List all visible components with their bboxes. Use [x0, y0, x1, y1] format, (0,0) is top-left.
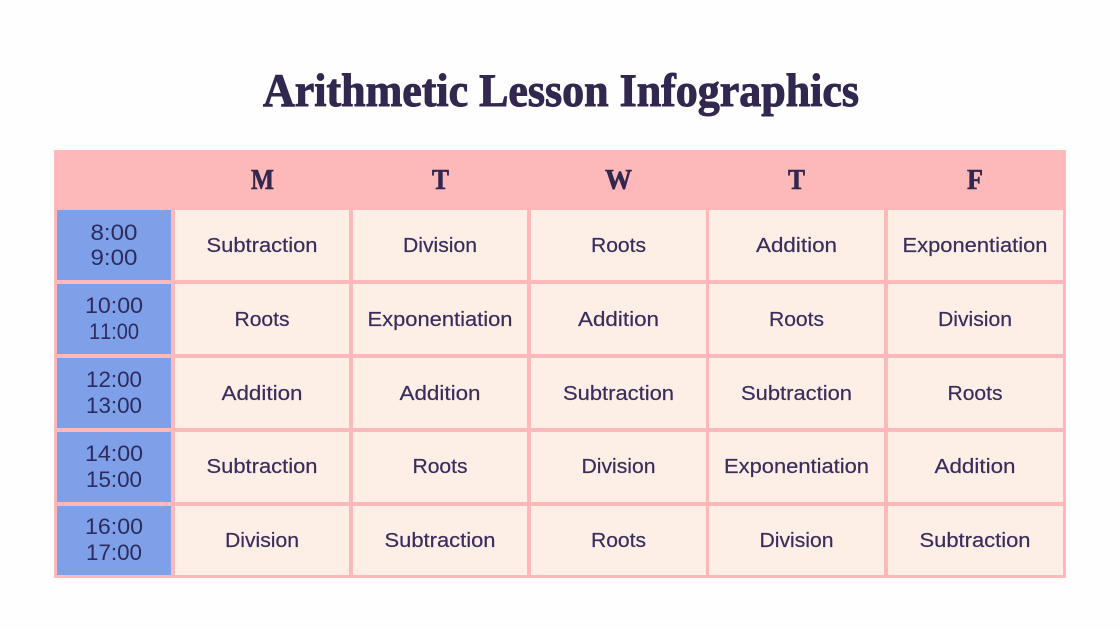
- time column: 13:00: [86, 393, 142, 418]
- row 16:00-17:00: [175, 506, 1063, 575]
- time column: 17:00: [86, 540, 142, 565]
- table background: [54, 150, 1066, 578]
- row 8:00-9:00: Division: [403, 235, 477, 257]
- row 14:00-15:00: Division: [582, 456, 656, 478]
- header row: weekdays: [251, 165, 983, 196]
- header row: weekdays: F: [967, 165, 983, 196]
- header row: weekdays: M: [251, 165, 274, 196]
- time column: 11:00: [89, 319, 139, 344]
- row 14:00-15:00: Roots: [412, 456, 468, 478]
- schedule table: [54, 150, 1066, 578]
- title: Arithmetic Lesson Infographics: [263, 65, 859, 117]
- row 14:00-15:00: [175, 432, 1063, 502]
- row 10:00-11:00: Exponentiation: [368, 309, 512, 331]
- row 16:00-17:00: Subtraction: [384, 530, 496, 552]
- row 12:00-13:00: [175, 358, 1063, 428]
- row 12:00-13:00: Addition: [400, 383, 480, 405]
- row 8:00-9:00: [175, 210, 1063, 280]
- row 10:00-11:00: Roots: [769, 309, 824, 331]
- row 12:00-13:00: Subtraction: [741, 383, 852, 405]
- row 10:00-11:00: [175, 284, 1063, 354]
- row 16:00-17:00: Division: [225, 530, 299, 552]
- row 14:00-15:00: Subtraction: [206, 456, 318, 478]
- row 12:00-13:00: Subtraction: [563, 383, 674, 405]
- header row: weekdays: T: [788, 165, 805, 196]
- row 12:00-13:00: Roots: [948, 383, 1002, 405]
- row 8:00-9:00: Exponentiation: [902, 235, 1048, 257]
- row 10:00-11:00: Roots: [234, 309, 290, 331]
- time column: 15:00: [86, 467, 142, 492]
- row 8:00-9:00: Roots: [591, 235, 646, 257]
- time column: 14:00: [85, 441, 143, 466]
- row 16:00-17:00: Roots: [591, 530, 646, 552]
- row 16:00-17:00: Division: [760, 530, 834, 552]
- header row: weekdays: T: [432, 165, 449, 196]
- row 14:00-15:00: Addition: [934, 456, 1016, 478]
- row 14:00-15:00: Exponentiation: [724, 456, 869, 478]
- row 10:00-11:00: Addition: [578, 309, 659, 331]
- row 8:00-9:00: Subtraction: [206, 235, 318, 257]
- time column: 16:00: [85, 514, 143, 539]
- time column: 10:00: [85, 293, 143, 318]
- row 10:00-11:00: Division: [938, 309, 1012, 331]
- row 16:00-17:00: Subtraction: [920, 530, 1030, 552]
- header row: weekdays: W: [605, 165, 632, 196]
- time column: [57, 210, 171, 575]
- time column: 8:00: [90, 220, 138, 245]
- time column: 12:00: [86, 367, 142, 392]
- row 8:00-9:00: Addition: [756, 235, 837, 257]
- time column: 9:00: [90, 245, 138, 270]
- row 12:00-13:00: Addition: [222, 383, 302, 405]
